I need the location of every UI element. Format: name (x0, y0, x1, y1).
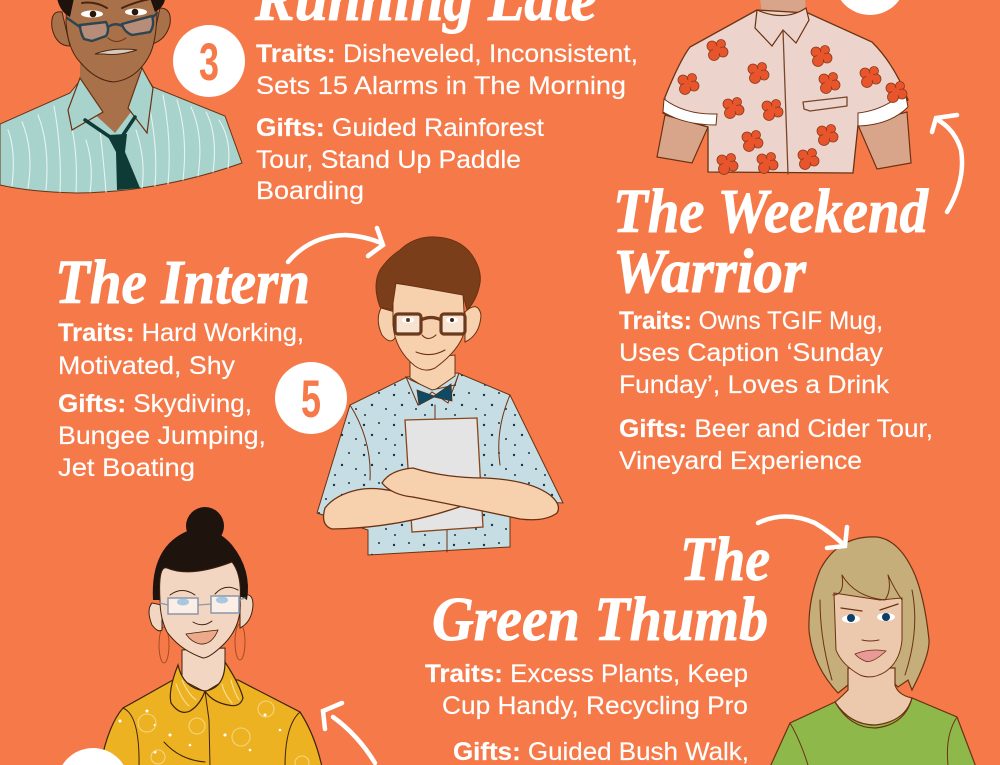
text: traits and gifts: Traits: Hard Working, (58, 319, 304, 347)
title: The Weekend Warrior: Warrior (613, 238, 807, 306)
crossed arms (324, 489, 462, 529)
title: The Green Thumb: The (680, 526, 770, 594)
bow tie (417, 384, 452, 405)
title: The Weekend Warrior: The Weekend (613, 178, 929, 246)
title: The Weekend Warrior (613, 178, 929, 306)
text: traits and gifts: Bungee Jumping, (58, 422, 266, 450)
glasses (168, 596, 239, 614)
number badge (cropped) (834, 0, 906, 15)
earrings (159, 627, 169, 663)
text: traits and gifts (58, 319, 304, 482)
text: traits and gifts: Cup Handy, Recycling Pro (442, 692, 748, 720)
text: traits and gifts: Gifts: Skydiving, (58, 390, 252, 418)
collar (170, 662, 243, 712)
text: traits and gifts: Traits: Disheveled, Inconsistent, (256, 40, 638, 68)
text: traits and gifts (256, 40, 638, 205)
arrow to figure (758, 516, 847, 548)
text: traits and gifts: Jet Boating (58, 454, 195, 482)
figure: student with glasses and bow tie (317, 237, 563, 555)
panel: Running Late (0, 0, 638, 205)
text: traits and gifts: Motivated, Shy (58, 352, 236, 380)
panel: yellow blouse persona (57, 507, 375, 765)
figure: man in floral shirt (657, 0, 911, 174)
text: traits and gifts: Gifts: Beer and Cider Tour, (619, 415, 933, 443)
figure: man with striped shirt and tie (0, 0, 242, 193)
title: The Green Thumb (432, 526, 770, 654)
text: traits and gifts: Tour, Stand Up Paddle (256, 146, 521, 174)
text: traits and gifts: Uses Caption ‘Sunday (619, 339, 884, 367)
figure: woman with hair bun (100, 507, 322, 765)
panel: The Intern (55, 228, 563, 555)
arrow up-left (323, 703, 375, 763)
number badge 6 (57, 748, 129, 765)
number badge 5 (275, 362, 347, 434)
title: The Green Thumb: Green Thumb (432, 586, 768, 654)
title: The Intern: The Intern (55, 249, 310, 317)
panel: The Weekend Warrior (613, 0, 962, 475)
figure: woman with bob and green shirt (770, 537, 976, 765)
clipboard paper (405, 418, 483, 532)
text: traits and gifts: Traits: Excess Plants, Keep (425, 660, 748, 688)
number badge 3 (173, 25, 245, 97)
arrow up (932, 115, 962, 212)
text: traits and gifts: Gifts: Guided Rainforest (256, 114, 544, 142)
number badge 3: 3 (199, 33, 219, 92)
number badge 5: 5 (301, 370, 321, 429)
text: traits and gifts: Funday’, Loves a Drink (619, 371, 890, 399)
glasses (395, 314, 465, 334)
text: traits and gifts (425, 660, 749, 765)
panel: The Green Thumb (425, 516, 976, 765)
text: traits and gifts: Vineyard Experience (619, 447, 862, 475)
text: traits and gifts: Sets 15 Alarms in The Morning (256, 72, 626, 100)
arrow right (288, 228, 383, 262)
text: traits and gifts (619, 307, 933, 475)
text: traits and gifts: Traits: Owns TGIF Mug, (619, 307, 883, 335)
text: traits and gifts: Boarding (256, 177, 364, 205)
